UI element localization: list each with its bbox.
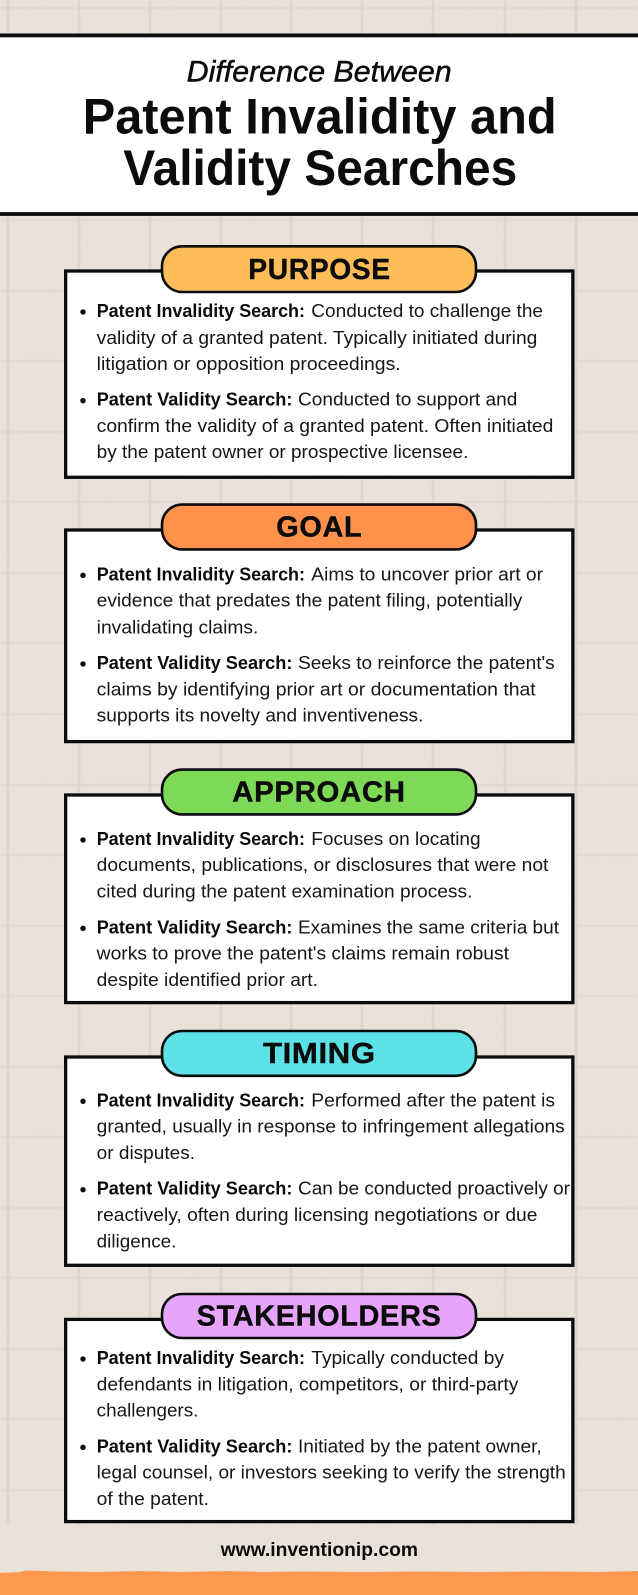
heading: purpose [162,246,476,292]
validity search text: despite identified prior art. [97,969,318,990]
invalidity search text [80,563,543,637]
heading: timing: TIMING [263,1038,376,1070]
invalidity search text: defendants in litigation, competitors, or third-party [97,1373,519,1394]
validity search text: Conducted to support and [298,389,517,410]
subtitle: Difference Between [187,56,452,89]
panel: approach [66,770,573,1003]
validity search text [80,1178,570,1251]
invalidity search text: Focuses on locating [311,828,481,849]
validity search text: supports its novelty and inventiveness. [97,705,423,726]
validity search text: Can be conducted proactively or [298,1178,570,1199]
validity search text: Examines the same criteria but [298,916,560,937]
invalidity search text: litigation or opposition proceedings. [97,353,401,374]
panel: goal [66,505,573,742]
validity search text: legal counsel, or investors seeking to verify the strength [97,1462,566,1483]
validity search text: Patent Validity Search: [97,389,292,410]
invalidity search text: Patent Invalidity Search: [97,300,305,321]
invalidity search text: validity of a granted patent. Typically initiated during [97,327,537,348]
heading: goal: GOAL [276,512,362,544]
validity search text: of the patent. [97,1488,209,1509]
panel: stakeholders [66,1294,573,1522]
validity search text [80,652,555,726]
title banner [0,35,638,214]
invalidity search text: challengers. [97,1400,198,1421]
validity search text: by the patent owner or prospective licensee. [97,441,468,462]
invalidity search text: Conducted to challenge the [311,300,543,321]
invalidity search text: Typically conducted by [311,1347,505,1368]
panel: purpose [66,246,573,477]
invalidity search text: Performed after the patent is [311,1089,555,1110]
invalidity search text: Aims to uncover prior art or [311,563,543,584]
main title: Patent Invalidity and [83,88,557,144]
heading: purpose: PURPOSE [248,254,391,286]
main title [83,88,557,196]
heading: stakeholders: STAKEHOLDERS [197,1300,441,1332]
validity search text: confirm the validity of a granted patent. Often initiated [97,415,553,436]
heading: goal [162,505,476,549]
invalidity search text [80,1089,565,1163]
validity search text: works to prove the patent's claims remain robust [96,943,510,964]
validity search text: diligence. [97,1230,176,1251]
invalidity search text: granted, usually in response to infringement allegations [97,1116,565,1137]
validity search text: reactively, often during licensing negotiations or due [97,1204,537,1225]
validity search text: claims by identifying prior art or documentation that [97,678,537,699]
validity search text [80,916,560,990]
invalidity search text: documents, publications, or disclosures that were not [97,854,549,875]
panel: timing [66,1031,573,1265]
validity search text: Patent Validity Search: [97,652,292,673]
invalidity search text: Patent Invalidity Search: [97,828,305,849]
invalidity search text [80,1347,519,1421]
validity search text [80,1435,566,1509]
heading: approach [162,770,476,814]
validity search text: Patent Validity Search: [97,1178,292,1199]
invalidity search text: or disputes. [97,1142,195,1163]
website footer: www.inventionip.com [220,1539,418,1561]
validity search text: Patent Validity Search: [97,1435,292,1456]
invalidity search text: Patent Invalidity Search: [97,563,305,584]
invalidity search text: Patent Invalidity Search: [97,1089,305,1110]
main title: Validity Searches [123,140,517,196]
invalidity search text: cited during the patent examination process. [97,880,472,901]
invalidity search text: Patent Invalidity Search: [97,1347,305,1368]
invalidity search text: invalidating claims. [97,616,258,637]
heading: timing [162,1031,476,1076]
validity search text: Seeks to reinforce the patent's [298,652,555,673]
invalidity search text: evidence that predates the patent filing, potentially [97,590,523,611]
heading: stakeholders [162,1294,476,1338]
torn orange strip [0,1570,638,1595]
heading: approach: APPROACH [232,777,406,809]
validity search text: Initiated by the patent owner, [298,1435,542,1456]
invalidity search text [80,300,543,374]
invalidity search text [80,828,549,901]
validity search text [80,389,553,462]
validity search text: Patent Validity Search: [97,916,292,937]
